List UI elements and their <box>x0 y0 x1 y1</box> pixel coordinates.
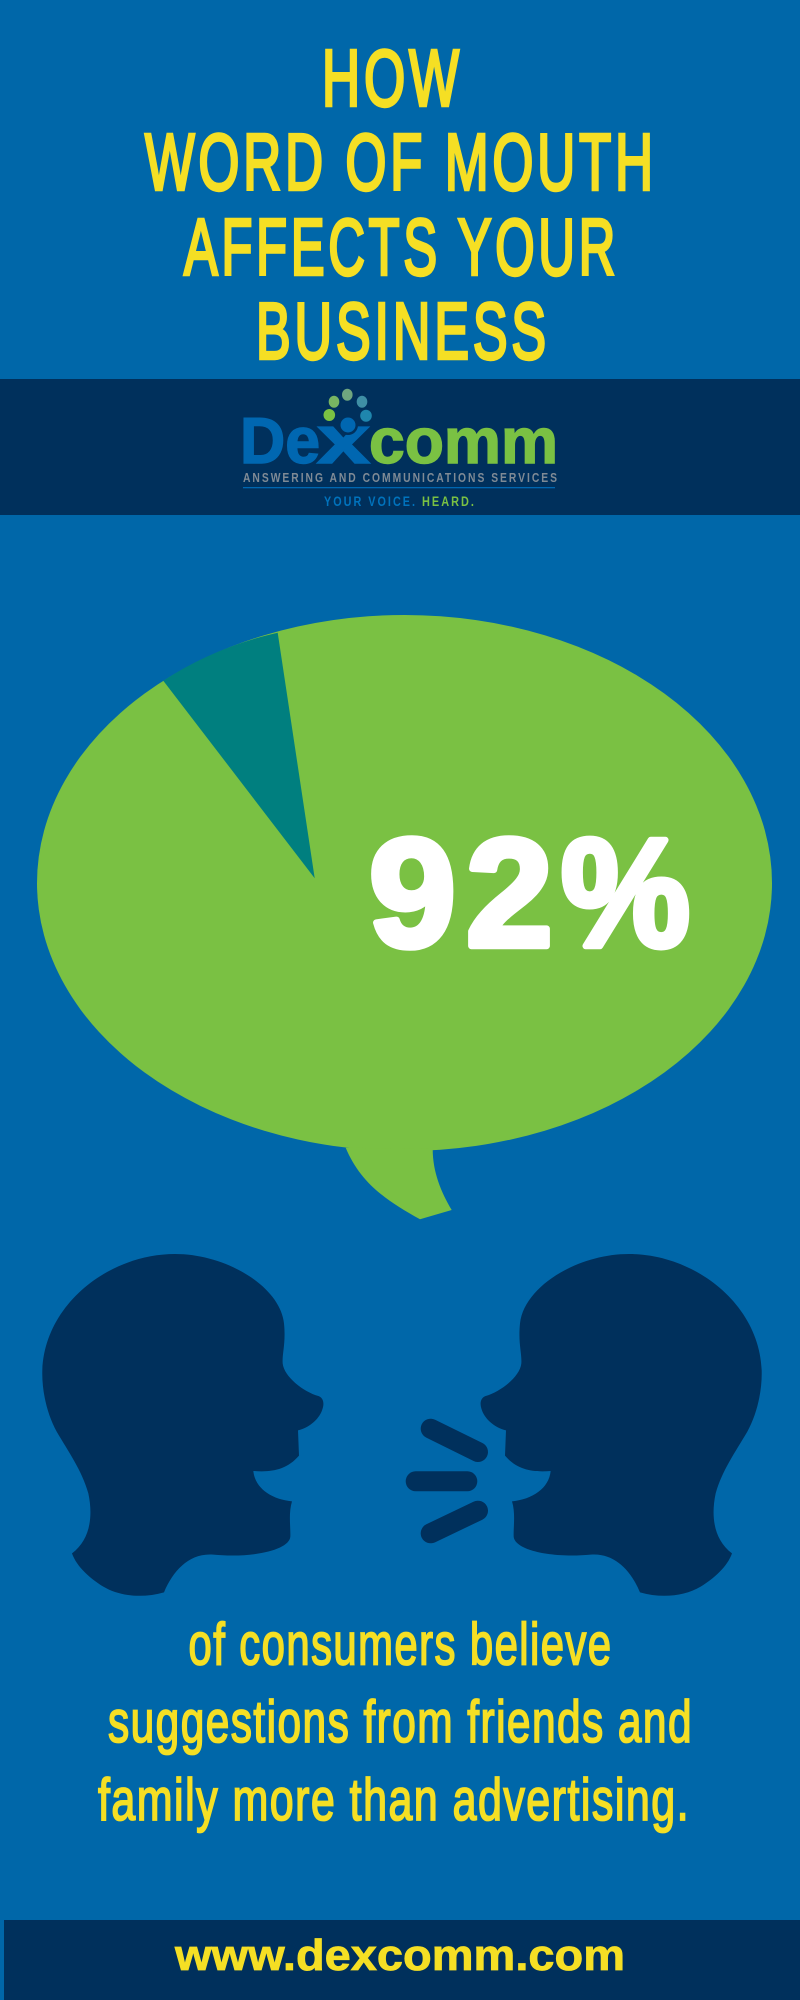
logo descriptor: ANSWERING AND COMMUNICATIONS SERVICES <box>243 470 559 485</box>
panel: footer band <box>4 1920 800 2000</box>
icon: logo dots <box>324 389 372 422</box>
website url: www.dexcomm.com <box>174 1931 625 1980</box>
title <box>145 34 657 376</box>
logo wordmark: De <box>240 404 320 477</box>
text block: statistic description: of consumers believe <box>188 1612 612 1678</box>
statistic: % <box>561 807 690 979</box>
logo wordmark: x <box>317 402 370 478</box>
title: BUSINESS <box>256 286 550 376</box>
speech bubble chart <box>37 615 772 1219</box>
title: HOW <box>322 34 463 122</box>
pie wedge <box>163 633 315 878</box>
icon: left head <box>42 1254 323 1596</box>
text block: statistic description <box>98 1612 693 1833</box>
logo wordmark: comm <box>369 405 558 477</box>
logo wordmark <box>240 402 558 478</box>
icon: right head <box>481 1254 762 1596</box>
logo tagline: YOUR VOICE. <box>324 494 417 509</box>
logo tagline: HEARD. <box>422 494 476 509</box>
logo: Dexcomm <box>240 389 559 509</box>
statistic <box>369 807 690 979</box>
panel: logo band <box>0 379 800 515</box>
statistic: 92 <box>369 807 563 979</box>
bubble <box>37 615 772 1219</box>
icon: speech lines <box>416 1429 478 1533</box>
